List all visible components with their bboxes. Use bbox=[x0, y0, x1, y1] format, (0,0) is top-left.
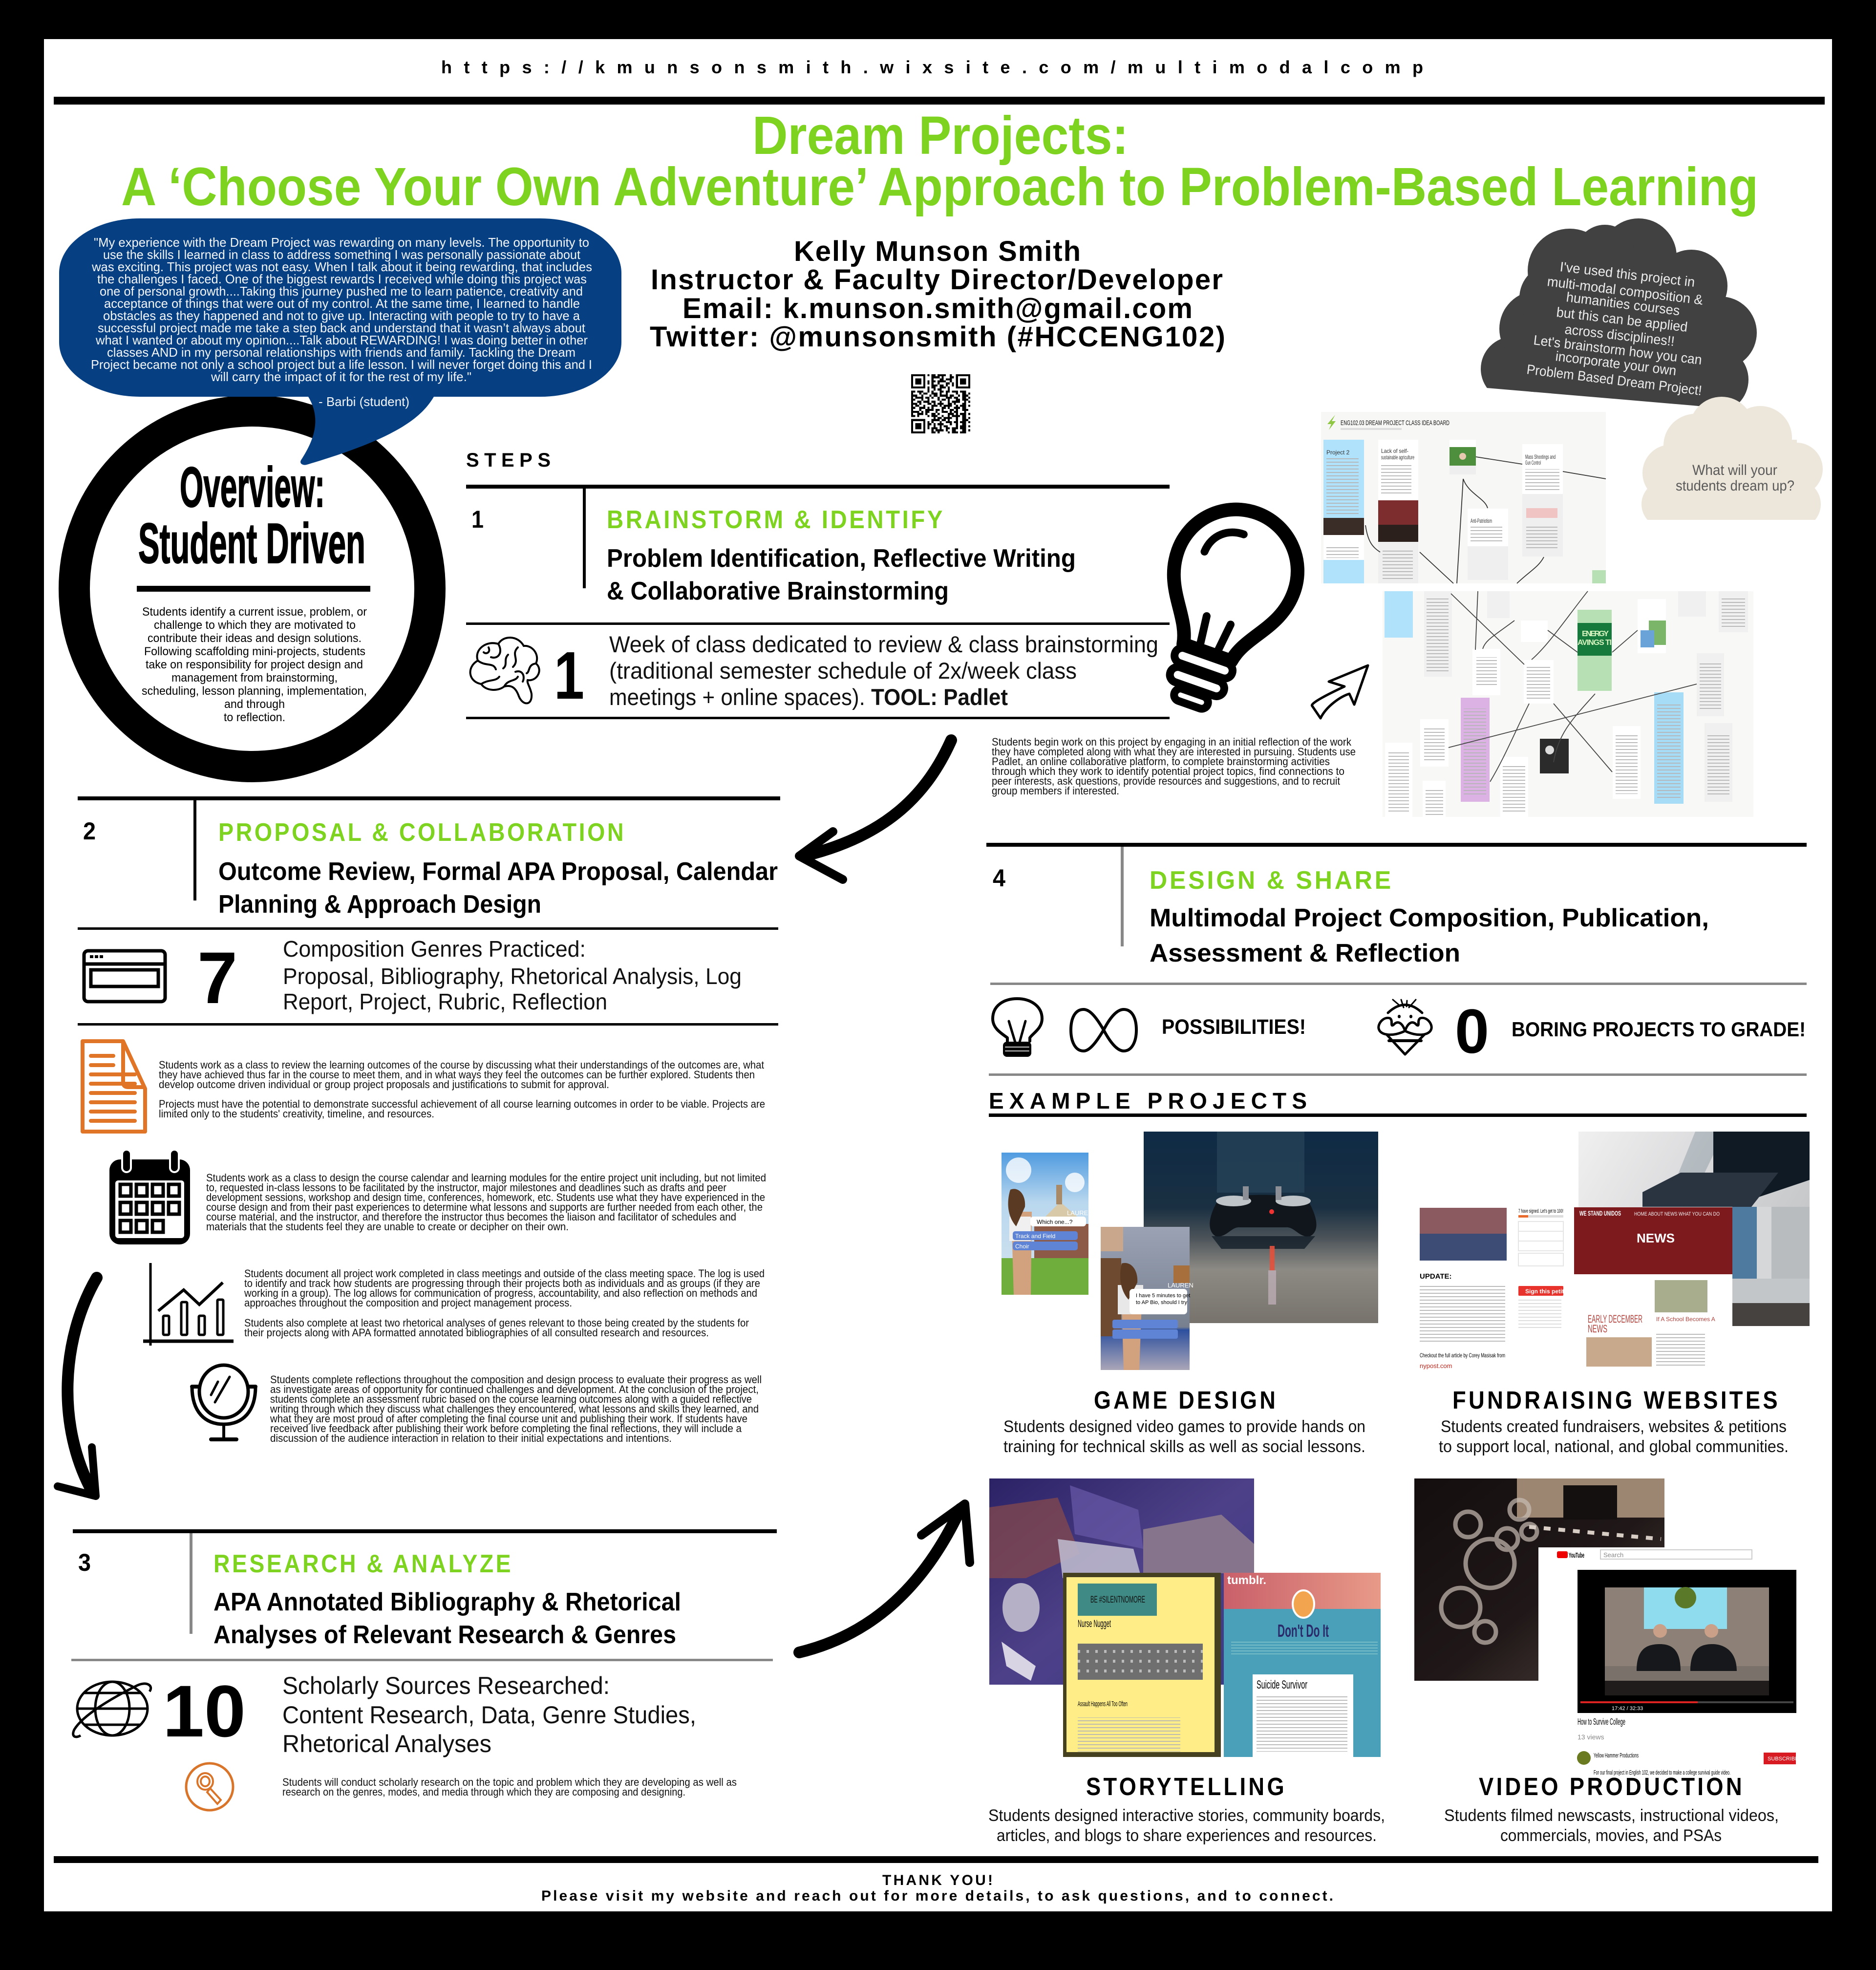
quote text: "My experience with the Dream Project was rewarding on many levels. The opportunity to bbox=[94, 235, 589, 250]
image: youtube page: Yellow Hammer Productions bbox=[1594, 1752, 1639, 1759]
icon: infinity bbox=[1071, 1009, 1136, 1051]
step 3 subheading: Analyses of Relevant Research & Genres bbox=[213, 1621, 676, 1649]
panel: step 2 proposal bbox=[78, 796, 780, 1026]
overview description: scheduling, lesson planning, implementation, bbox=[142, 685, 367, 698]
image: tumblr page: Don't Do It bbox=[1278, 1621, 1329, 1641]
paragraph: learning outcomes: Students work as a class to review the learning outcomes of the course by discussing what their understandings of the outcomes are, what bbox=[159, 1059, 764, 1071]
bottom rule bbox=[54, 1856, 1818, 1863]
quote text: will carry the impact of it for the rest of my life." bbox=[211, 369, 471, 384]
step 3 subheading bbox=[213, 1588, 681, 1649]
icon: orange document bbox=[83, 1041, 145, 1132]
panel: step 4 design bbox=[986, 843, 1807, 1117]
overview ring bbox=[74, 411, 430, 767]
paragraph: course calendar: materials that the students feel they are unable to create or decipher on their own. bbox=[206, 1221, 569, 1233]
screenshot: padlet idea board top bbox=[1321, 412, 1606, 583]
dark thought cloud bbox=[1481, 218, 1757, 420]
image: news page: If A School Becomes A bbox=[1656, 1316, 1715, 1323]
icon: calendar bbox=[109, 1150, 190, 1244]
title: Dream Projects: bbox=[752, 106, 1129, 166]
screenshot: padlet idea board top: Project 2 bbox=[1326, 449, 1350, 456]
storytelling caption bbox=[988, 1806, 1385, 1845]
footer bbox=[541, 1872, 1333, 1904]
footer: Please visit my website and reach out for more details, to ask questions, and to connect. bbox=[541, 1888, 1333, 1904]
image: game screen two bbox=[1101, 1227, 1194, 1370]
step 2 subheading bbox=[218, 857, 778, 919]
panel: step 3 research: 3 bbox=[78, 1549, 91, 1576]
image: petition page bbox=[1415, 1207, 1574, 1370]
example projects heading: EXAMPLE PROJECTS bbox=[989, 1088, 1307, 1113]
icon: qr code bbox=[911, 374, 970, 433]
paragraph: course calendar bbox=[206, 1172, 766, 1233]
paragraph: project log bbox=[244, 1267, 765, 1339]
quote text: classes AND in my personal relationships with friends and family. Tackling the Dream bbox=[107, 345, 576, 360]
image: game screen one: Which one...? bbox=[1037, 1219, 1073, 1225]
step 4 subheading: Assessment & Reflection bbox=[1150, 939, 1460, 967]
image: news page: EARLY DECEMBER bbox=[1588, 1313, 1642, 1325]
icon: globe bbox=[73, 1682, 151, 1737]
image: tumblr page: tumblr. bbox=[1227, 1574, 1266, 1587]
step 1 description: they have completed along with what they are interested in pursuing. Students use bbox=[992, 746, 1356, 758]
paragraph: course calendar: to, requested in-class lessons to be facilitated by the instructor, major milestones and deadlines such as drafts and peer bbox=[206, 1181, 726, 1194]
overview description: Students identify a current issue, problem, or bbox=[142, 605, 367, 619]
author block: Email: k.munson.smith@gmail.com bbox=[682, 293, 1193, 324]
overview description: management from brainstorming, bbox=[171, 671, 338, 685]
quote text: - Barbi (student) bbox=[319, 394, 409, 409]
fundraising heading: FUNDRAISING WEBSITES bbox=[1452, 1386, 1780, 1414]
game design caption: training for technical skills as well as social lessons. bbox=[1003, 1437, 1365, 1456]
quote text: Project became not only a school project but a life lesson. I will never forget doing this and I bbox=[91, 357, 592, 372]
step 1 subheading bbox=[607, 544, 1076, 605]
author block: Instructor & Faculty Director/Developer bbox=[651, 264, 1223, 296]
author block: Kelly Munson Smith bbox=[794, 236, 1081, 267]
sources text: Scholarly Sources Researched: bbox=[282, 1672, 610, 1699]
example: fundraising websites bbox=[1415, 1132, 1810, 1456]
paragraph: project log: their projects along with APA formatted annotated bibliographies of all consulted research and resources. bbox=[244, 1327, 709, 1339]
image: youtube page: How to Survive College bbox=[1578, 1717, 1625, 1727]
paragraph: reflections bbox=[270, 1373, 762, 1444]
icon: chart bbox=[143, 1263, 234, 1346]
paragraph: course calendar: course design and from their past experiences to determine what lessons and supports are further needed from each other, the bbox=[206, 1201, 763, 1213]
overview description: challenge to which they are motivated to bbox=[154, 619, 356, 632]
step 1 description: Students begin work on this project by engaging in an initial reflection of the work bbox=[992, 736, 1352, 748]
dark cloud text: Let's brainstorm how you can bbox=[1533, 332, 1703, 367]
image: nurse nugget page bbox=[1063, 1573, 1221, 1757]
step 1 description: group members if interested. bbox=[992, 785, 1119, 797]
quote text: use the skills I learned in class to address something I was personally passionate about bbox=[103, 247, 581, 262]
image: game screen one: Choir bbox=[1015, 1243, 1029, 1250]
screenshot: padlet idea board top: Lack of self- bbox=[1381, 448, 1408, 454]
top rule bbox=[54, 97, 1825, 105]
paragraph: reflections: discussion of the audience interaction in relation to their initial expectations and intentions. bbox=[270, 1432, 672, 1444]
sources text bbox=[282, 1672, 696, 1757]
image: youtube page: YouTube bbox=[1569, 1551, 1584, 1560]
step 1 stats text: (traditional semester schedule of 2x/week class bbox=[609, 658, 1077, 684]
dark cloud text: humanities courses bbox=[1565, 289, 1681, 318]
panel: step 3 research: 10 bbox=[163, 1670, 246, 1752]
paragraph: project log: approaches throughout the composition and project management process. bbox=[244, 1297, 572, 1309]
website url: https://kmunsonsmith.wixsite.com/multimodalcomp bbox=[441, 57, 1423, 77]
paragraph: scholarly research bbox=[282, 1776, 737, 1798]
paragraph: reflections: as investigate areas of opportunity for continued challenges and development. At the conclusion of the project, bbox=[270, 1383, 759, 1395]
panel: step 2 proposal: 7 bbox=[197, 937, 237, 1019]
paragraph: learning outcomes: Projects must have the potential to demonstrate successful achievement of all course learning outcomes in order to be viable. Projects are bbox=[159, 1098, 765, 1110]
screenshot: padlet idea board top: Gun Control bbox=[1525, 459, 1541, 466]
overview description: take on responsibility for project design and bbox=[146, 658, 363, 671]
overview heading: Overview: bbox=[180, 455, 325, 519]
dark cloud text: but this can be applied bbox=[1556, 304, 1688, 335]
icon: brain bbox=[470, 638, 539, 703]
icon: moustache face bbox=[1379, 1000, 1431, 1054]
dark cloud text: incorporate your own bbox=[1555, 348, 1677, 378]
step 1 stats text bbox=[609, 631, 1158, 710]
video production caption bbox=[1444, 1806, 1779, 1845]
image: youtube page: 17:42 / 32:33 bbox=[1612, 1706, 1643, 1712]
quote text: what I wanted or about my opinion....Talk about REWARDING! I was doing better in other bbox=[95, 333, 588, 347]
paragraph: reflections: writing through which they discuss what challenges they encountered, what lessons and skills they learned, and bbox=[270, 1403, 759, 1415]
icon: mirror bbox=[192, 1365, 256, 1439]
paragraph: project log: to identify and track how students are progressing through their projects both as individuals and as groups (if they are bbox=[244, 1277, 760, 1289]
storytelling caption: articles, and blogs to share experiences and resources. bbox=[997, 1826, 1377, 1845]
icon: browser window bbox=[84, 951, 165, 1002]
image: youtube page: 13 views bbox=[1578, 1733, 1604, 1741]
step 2 subheading: Outcome Review, Formal APA Proposal, Calendar bbox=[218, 857, 778, 886]
arrow: step 1 to step 2 bbox=[799, 740, 951, 879]
game design caption bbox=[1003, 1417, 1365, 1456]
paragraph: reflections: what they are most proud of after completing the final course unit and publishing their work. If students have bbox=[270, 1413, 747, 1425]
light cloud text: What will your bbox=[1692, 462, 1777, 478]
screenshot: padlet idea board bottom: ENERGY bbox=[1582, 630, 1609, 638]
step 1 subheading: Problem Identification, Reflective Writing bbox=[607, 544, 1076, 573]
title: A ‘Choose Your Own Adventure’ Approach to Problem-Based Learning bbox=[121, 157, 1758, 217]
image: game screen one: LAUREN bbox=[1067, 1209, 1093, 1217]
image: tumblr page bbox=[1224, 1573, 1381, 1757]
paragraph: project log: working in a group). The log allows for communication of progress, accountability, and also reflection on methods and bbox=[244, 1287, 757, 1299]
image: petition page: Checkout the full article by Corey Masisak from bbox=[1420, 1352, 1505, 1359]
genres text: Proposal, Bibliography, Rhetorical Analysis, Log bbox=[283, 964, 742, 989]
image: film camera bbox=[1414, 1478, 1664, 1681]
example: game design bbox=[1002, 1132, 1378, 1456]
video production heading: VIDEO PRODUCTION bbox=[1479, 1773, 1745, 1800]
image: books bbox=[989, 1478, 1254, 1685]
dark cloud text: Problem Based Dream Project! bbox=[1526, 362, 1703, 398]
arrow: step 2 to step 3 bbox=[58, 1278, 97, 1496]
image: game screen two: I have 5 minutes to get bbox=[1136, 1293, 1190, 1299]
overview text block bbox=[137, 455, 370, 724]
genres text: Composition Genres Practiced: bbox=[283, 936, 586, 962]
overview heading: Student Driven bbox=[138, 512, 365, 575]
step 3 subheading: APA Annotated Bibliography & Rhetorical bbox=[213, 1588, 681, 1616]
game design caption: Students designed video games to provide hands on bbox=[1003, 1417, 1365, 1436]
screenshot: padlet idea board top: Anti-Patriotism bbox=[1471, 517, 1492, 524]
fundraising caption: Students created fundraisers, websites & petitions bbox=[1441, 1417, 1787, 1436]
quote text bbox=[91, 235, 592, 409]
image: news page: HOME ABOUT NEWS WHAT YOU CAN DO bbox=[1634, 1211, 1720, 1217]
paragraph: learning outcomes: they have achieved thus far in the course to meet them, and in what ways they feel the outcomes can be further explored. Students then bbox=[159, 1069, 755, 1081]
image: news page: NEWS bbox=[1588, 1323, 1607, 1335]
step 4 subheading: Multimodal Project Composition, Publication, bbox=[1150, 904, 1709, 932]
image: news page: WE STAND UNIDOS bbox=[1579, 1209, 1621, 1217]
paragraph: project log: Students also complete at least two rhetorical analyses of genes relevant to those being created by the students for bbox=[244, 1317, 749, 1329]
image: petition page: UPDATE: bbox=[1420, 1272, 1452, 1281]
overview heading bbox=[138, 455, 365, 575]
dark cloud text: across disciplines!! bbox=[1564, 321, 1675, 349]
steps label: STEPS bbox=[466, 450, 551, 471]
paragraph: reflections: students complete an assessment rubric based on the course learning outcomes along with a guided reflective bbox=[270, 1393, 752, 1405]
step 1 stats text: meetings + online spaces). TOOL: Padlet bbox=[609, 684, 1008, 710]
panel: step 1 brainstorm: 1 bbox=[471, 506, 484, 533]
panel: step 4 design: 0 bbox=[1455, 997, 1489, 1067]
image: tumblr page: Suicide Survivor bbox=[1257, 1678, 1307, 1692]
paragraph: scholarly research: Students will conduct scholarly research on the topic and problem which they are developing as well as bbox=[282, 1776, 737, 1788]
sources text: Rhetorical Analyses bbox=[282, 1730, 491, 1757]
step 1 heading: BRAINSTORM & IDENTIFY bbox=[607, 506, 945, 534]
storytelling caption: Students designed interactive stories, community boards, bbox=[988, 1806, 1385, 1825]
image: laptop bbox=[1578, 1132, 1810, 1326]
quote text: successful project made me take a step back and understand that it wasn’t always about bbox=[98, 321, 586, 335]
step 3 heading: RESEARCH & ANALYZE bbox=[213, 1550, 513, 1578]
icon: light bulb bbox=[1131, 492, 1315, 725]
image: game controller bbox=[1144, 1132, 1378, 1323]
step 4 heading: DESIGN & SHARE bbox=[1150, 866, 1393, 895]
quote text: acceptance of things that were out of my control. At the same time, I learned to handle bbox=[104, 296, 580, 311]
step 1 description: Padlet, an online collaborative platform, to complete brainstorming activities bbox=[992, 755, 1330, 768]
image: news page: NEWS bbox=[1637, 1231, 1675, 1245]
image: game screen one bbox=[1002, 1153, 1093, 1295]
fundraising caption bbox=[1439, 1417, 1789, 1456]
example: storytelling bbox=[988, 1478, 1385, 1845]
paragraph: course calendar: Students work as a class to design the course calendar and learning modules for the entire project unit including, but not limited bbox=[206, 1172, 766, 1184]
image: youtube page bbox=[1538, 1547, 1803, 1776]
dark cloud text: I've used this project in bbox=[1559, 259, 1696, 290]
overview description: contribute their ideas and design solutions. bbox=[148, 632, 362, 645]
overview description: to reflection. bbox=[224, 711, 285, 724]
icon: outline bulb bbox=[993, 999, 1042, 1055]
example: video production bbox=[1414, 1478, 1803, 1845]
author block bbox=[650, 236, 1225, 353]
screenshot: padlet idea board top: sustainable agriculture bbox=[1381, 454, 1414, 461]
genres text: Report, Project, Rubric, Reflection bbox=[283, 989, 607, 1014]
step 1 subheading: & Collaborative Brainstorming bbox=[607, 577, 949, 605]
image: game screen two: to AP Bio, should I try bbox=[1136, 1300, 1187, 1306]
overview description: and through bbox=[224, 698, 285, 711]
overview description: Following scaffolding mini-projects, students bbox=[144, 645, 365, 658]
paragraph: learning outcomes: limited only to the students' creativity, timeline, and resources. bbox=[159, 1108, 434, 1120]
image: petition page: Sign this petition bbox=[1525, 1288, 1573, 1295]
step 1 description: peer interests, ask questions, provide resources and suggestions, and to recruit bbox=[992, 775, 1340, 787]
step 2 subheading: Planning & Approach Design bbox=[218, 890, 541, 919]
overview description bbox=[142, 605, 367, 724]
video production caption: commercials, movies, and PSAs bbox=[1500, 1826, 1722, 1845]
image: petition page: nypost.com bbox=[1420, 1362, 1452, 1370]
video production caption: Students filmed newscasts, instructional videos, bbox=[1444, 1806, 1779, 1825]
image: youtube page: Search bbox=[1603, 1551, 1623, 1559]
image: petition page: 7 have signed. Let's get to 100! bbox=[1518, 1208, 1563, 1214]
arrow: step 3 to step 4 bbox=[799, 1504, 970, 1652]
game design heading: GAME DESIGN bbox=[1094, 1386, 1278, 1414]
quote text: was exciting. This project was not easy. When I talk about it being rewarding, that includes bbox=[91, 259, 592, 274]
quote text: one of personal growth....Taking this journey pushed me to learn patience, creativity and bbox=[100, 284, 583, 299]
step 1 description: through which they work to identify potential project topics, find connections to bbox=[992, 765, 1344, 777]
paragraph: reflections: Students complete reflections throughout the composition and design process to evaluate their progress as well bbox=[270, 1373, 762, 1386]
panel: step 1 brainstorm bbox=[466, 485, 1170, 719]
step 4 subheading bbox=[1150, 904, 1709, 967]
icon: small outline arrow bbox=[1312, 665, 1368, 718]
step 2 heading: PROPOSAL & COLLABORATION bbox=[218, 818, 626, 847]
paragraph: learning outcomes bbox=[159, 1059, 765, 1120]
panel: step 4 design: POSSIBILITIES! bbox=[1162, 1015, 1306, 1039]
image: game screen two: LAUREN bbox=[1168, 1282, 1194, 1289]
quote text: obstacles as they happened and not to give up. Interacting with people to try to have a bbox=[103, 308, 580, 323]
author block: Twitter: @munsonsmith (#HCCENG102) bbox=[650, 321, 1225, 353]
image: nurse nugget page: Nurse Nugget bbox=[1078, 1618, 1111, 1629]
step 1 stats text: Week of class dedicated to review & class brainstorming bbox=[609, 631, 1158, 657]
light thought cloud bbox=[1642, 397, 1823, 529]
screenshot: padlet idea board top: Mass Shootings and bbox=[1525, 453, 1556, 460]
dark cloud text bbox=[1526, 259, 1704, 398]
paragraph: reflections: received live feedback after publishing their work before completing the final reflections, they will include a bbox=[270, 1422, 742, 1435]
storytelling heading: STORYTELLING bbox=[1086, 1773, 1287, 1800]
paragraph: scholarly research: research on the genres, modes, and media through which they are composing and designing. bbox=[282, 1786, 685, 1798]
image: nurse nugget page: BE #SILENTNOMORE bbox=[1090, 1595, 1145, 1605]
paragraph: project log: Students document all project work completed in class meetings and outside of the class meeting space. The log is used bbox=[244, 1267, 765, 1280]
paragraph: learning outcomes: develop outcome driven individual or group project proposals and justifications to submit for approval. bbox=[159, 1078, 609, 1091]
light cloud text bbox=[1676, 462, 1794, 494]
panel: step 4 design: 4 bbox=[993, 864, 1005, 892]
blue student quote bubble bbox=[59, 218, 621, 465]
screenshot: padlet idea board top: ENG102.03 DREAM PROJECT CLASS IDEA BOARD bbox=[1341, 419, 1450, 427]
screenshot: padlet idea board bottom bbox=[1383, 591, 1753, 817]
screenshot: padlet idea board bottom: AVINGS TI bbox=[1578, 639, 1612, 647]
image: youtube page: For our final project in English 102, we decided to make a college survival guide video. bbox=[1594, 1769, 1730, 1776]
step 1 description bbox=[992, 736, 1356, 797]
panel: step 2 proposal: 2 bbox=[83, 817, 96, 845]
genres text bbox=[283, 936, 742, 1014]
paragraph: course calendar: course material, and the instructor, and therefore the instructor thus becomes the liaison and facilitator of schedules and bbox=[206, 1211, 736, 1223]
light cloud text: students dream up? bbox=[1676, 478, 1794, 494]
image: news page bbox=[1574, 1207, 1732, 1370]
footer: THANK YOU! bbox=[882, 1872, 993, 1888]
paragraph: course calendar: development sessions, workshop and design time, conferences, homework, etc. Students use what they have experienced in the bbox=[206, 1191, 765, 1203]
panel: step 3 research bbox=[71, 1529, 777, 1810]
title bbox=[121, 106, 1758, 217]
image: game screen one: Track and Field bbox=[1015, 1233, 1055, 1240]
quote text: the challenges I faced. One of the biggest rewards I received while doing this project was bbox=[97, 272, 587, 286]
sources text: Content Research, Data, Genre Studies, bbox=[282, 1701, 696, 1729]
image: nurse nugget page: Assault Happens All Too Often bbox=[1078, 1700, 1128, 1708]
dark cloud text: multi-modal composition & bbox=[1546, 274, 1704, 308]
image: youtube page: SUBSCRIBE 0 bbox=[1768, 1756, 1803, 1762]
panel: step 1 brainstorm: 1 bbox=[554, 638, 584, 713]
fundraising caption: to support local, national, and global communities. bbox=[1439, 1437, 1789, 1456]
icon: magnifier bbox=[186, 1763, 233, 1810]
panel: step 4 design: BORING PROJECTS TO GRADE! bbox=[1512, 1018, 1806, 1041]
